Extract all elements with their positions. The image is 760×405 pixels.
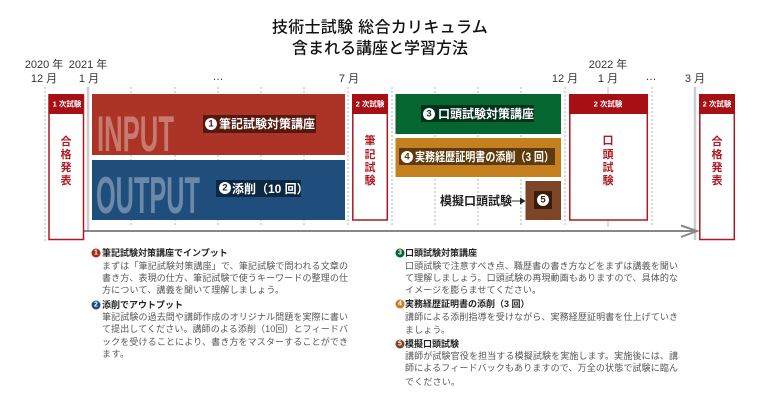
text block: 3 口頭試験対策講座 — [396, 247, 678, 295]
exam box: 2次試験 口頭試験: 試 — [602, 161, 614, 174]
panel: 口頭試験対策講座: 口頭試験対策講座 — [438, 106, 534, 121]
exam box: 2次試験 筆記試験: 2 次試験 — [356, 98, 385, 108]
timeline date labels — [25, 57, 705, 85]
panel: INPUT 筆記試験対策講座: 筆記試験対策講座 — [219, 116, 315, 131]
timeline date labels: 7 月 — [339, 73, 359, 85]
timeline date labels: 2022 年 — [589, 57, 627, 71]
timeline date labels: … — [212, 71, 224, 83]
text block: 3 口頭試験対策講座: て理解しましょう。口頭試験の再現動画もありますので、具体的な — [405, 272, 678, 283]
text block: 4 実務経歴証明書の添削: 4 — [398, 300, 402, 308]
text block: 3 口頭試験対策講座: 口頭試験対策講座 — [405, 247, 477, 258]
exam box: 2次試験 口頭試験: 験 — [602, 173, 614, 187]
timeline date labels: 1 月 — [598, 73, 618, 85]
timeline arrow — [84, 226, 697, 237]
exam box: 1次試験 合格発表: 格 — [60, 147, 72, 161]
text block: 2 添削でアウトプット — [92, 299, 348, 359]
text block: 2 添削でアウトプット: ックを受けることにより、書き方をマスターすることができ — [102, 336, 348, 347]
exam box: 1次試験 合格発表: 1 次試験 — [53, 98, 82, 108]
timeline date labels: … — [646, 71, 656, 83]
text block: 1 筆記試験対策講座でインプット: まずは「筆記試験対策講座」で、筆記試験で問われる文章の — [102, 260, 348, 271]
exam box: 2次試験 合格発表: 表 — [712, 173, 722, 187]
exam box: 2次試験 合格発表: 格 — [712, 147, 722, 161]
text block: 2 添削でアウトプット: て提出してください。講師のよる添削（10回）とフィードバ — [102, 323, 348, 334]
timeline date labels: 1 月 — [79, 73, 99, 85]
exam box: 2次試験 筆記試験: 試 — [364, 161, 376, 174]
panel: INPUT 筆記試験対策講座 — [92, 94, 345, 162]
text block: 1 筆記試験対策講座でインプット: 方について、講義を聞いて理解しましょう。 — [102, 284, 284, 295]
title: 技術士試験 総合カリキュラム — [272, 18, 488, 36]
panel: 口頭試験対策講座 — [396, 94, 561, 134]
exam box: 2次試験 口頭試験: 頭 — [602, 148, 614, 161]
timeline date labels: 3 月 — [685, 73, 705, 85]
panel: OUTPUT 添削: 添削（10 回） — [232, 181, 309, 196]
text block: 5 模擬口頭試験: でください。 — [405, 377, 460, 387]
timeline date labels: 12 月 — [552, 73, 578, 85]
timeline date labels: 12 月 — [31, 73, 57, 85]
text block: 2 添削でアウトプット: 筆記試験の過去問や講師作成のオリジナル問題を実際に書い — [102, 311, 348, 322]
exam box: 2次試験 合格発表: 合 — [712, 134, 722, 148]
panel: INPUT 筆記試験対策講座: INPUT — [97, 106, 174, 162]
panel: OUTPUT 添削: 2 — [222, 182, 228, 194]
exam box: 2次試験 合格発表: 2 次試験 — [703, 98, 732, 108]
text block: 5 模擬口頭試験: 師によるフィードバックもありますので、万全の状態で試験に臨ん — [405, 362, 678, 373]
text block: 4 実務経歴証明書の添削 — [396, 298, 678, 335]
panel: INPUT 筆記試験対策講座: 1 — [208, 118, 214, 130]
exam box: 2次試験 筆記試験 — [352, 94, 388, 220]
timeline date labels: 2020 年 — [25, 57, 63, 71]
exam box: 2次試験 口頭試験: 口 — [602, 135, 614, 147]
text block: 3 口頭試験対策講座: 口頭試験で注意すべき点、職歴書の書き方などをまずは講義を聞い — [405, 260, 678, 271]
text block: 3 口頭試験対策講座: イメージを膨らませてください。 — [405, 284, 541, 295]
exam box: 2次試験 筆記試験: 記 — [364, 148, 376, 161]
timeline date labels: 2021 年 — [69, 57, 107, 71]
text block: 2 添削でアウトプット: 添削でアウトプット — [102, 299, 183, 310]
text block: 5 模擬口頭試験 — [396, 338, 678, 387]
panel: OUTPUT 添削: OUTPUT — [96, 167, 200, 225]
exam box: 2次試験 合格発表 — [699, 94, 735, 240]
title: 含まれる講座と学習方法 — [292, 38, 468, 58]
text block: 1 筆記試験対策講座でインプット — [92, 247, 348, 295]
text block: 2 添削でアウトプット: ます。 — [102, 349, 129, 359]
exam box: 1次試験 合格発表 — [48, 94, 84, 240]
panel: 実務経歴証明書の添削 — [396, 138, 561, 177]
exam box: 2次試験 口頭試験 — [569, 94, 648, 220]
text block: 5 模擬口頭試験: 講師が試験官役を担当する模擬試験を実施します。実施後には、講 — [405, 350, 678, 361]
text block: 1 筆記試験対策講座でインプット: 1 — [94, 250, 98, 256]
title — [272, 18, 488, 58]
exam box: 2次試験 合格発表: 発 — [712, 160, 722, 174]
panel: 実務経歴証明書の添削: 4 — [404, 152, 410, 162]
exam box: 1次試験 合格発表: 表 — [60, 173, 72, 187]
text block: 3 口頭試験対策講座: 3 — [398, 250, 402, 256]
panel: 模擬口頭試験 — [526, 181, 561, 220]
exam box: 1次試験 合格発表: 合 — [60, 134, 72, 148]
text block: 4 実務経歴証明書の添削: 実務経歴証明書の添削（3 回） — [405, 298, 530, 309]
text block: 5 模擬口頭試験: 模擬口頭試験 — [405, 338, 459, 349]
panel: 実務経歴証明書の添削: 実務経歴証明書の添削（3 回） — [415, 149, 554, 164]
exam box: 1次試験 合格発表: 発 — [60, 160, 72, 174]
exam box: 2次試験 筆記試験: 験 — [364, 173, 376, 187]
panel: 模擬口頭試験: 5 — [540, 194, 546, 206]
exam box: 2次試験 口頭試験: 2 次試験 — [594, 98, 623, 108]
text block: 2 添削でアウトプット: 2 — [94, 302, 98, 308]
exam box: 2次試験 筆記試験: 筆 — [364, 133, 376, 147]
text block: 1 筆記試験対策講座でインプット: 筆記試験対策講座でインプット — [102, 247, 228, 258]
text block: 1 筆記試験対策講座でインプット: 書き方、表現の仕方、筆記試験で使うキーワードの整理の仕 — [102, 272, 348, 283]
text block: 5 模擬口頭試験: 5 — [398, 340, 402, 348]
panel: 口頭試験対策講座: 3 — [426, 108, 432, 120]
text block: 4 実務経歴証明書の添削: 講師による添削指導を受けながら、実務経歴証明書を仕上げていき — [405, 311, 678, 322]
label with arrow: 模擬口頭試験: 模擬口頭試験 — [440, 193, 512, 208]
text block: 4 実務経歴証明書の添削: ましょう。 — [405, 325, 450, 335]
